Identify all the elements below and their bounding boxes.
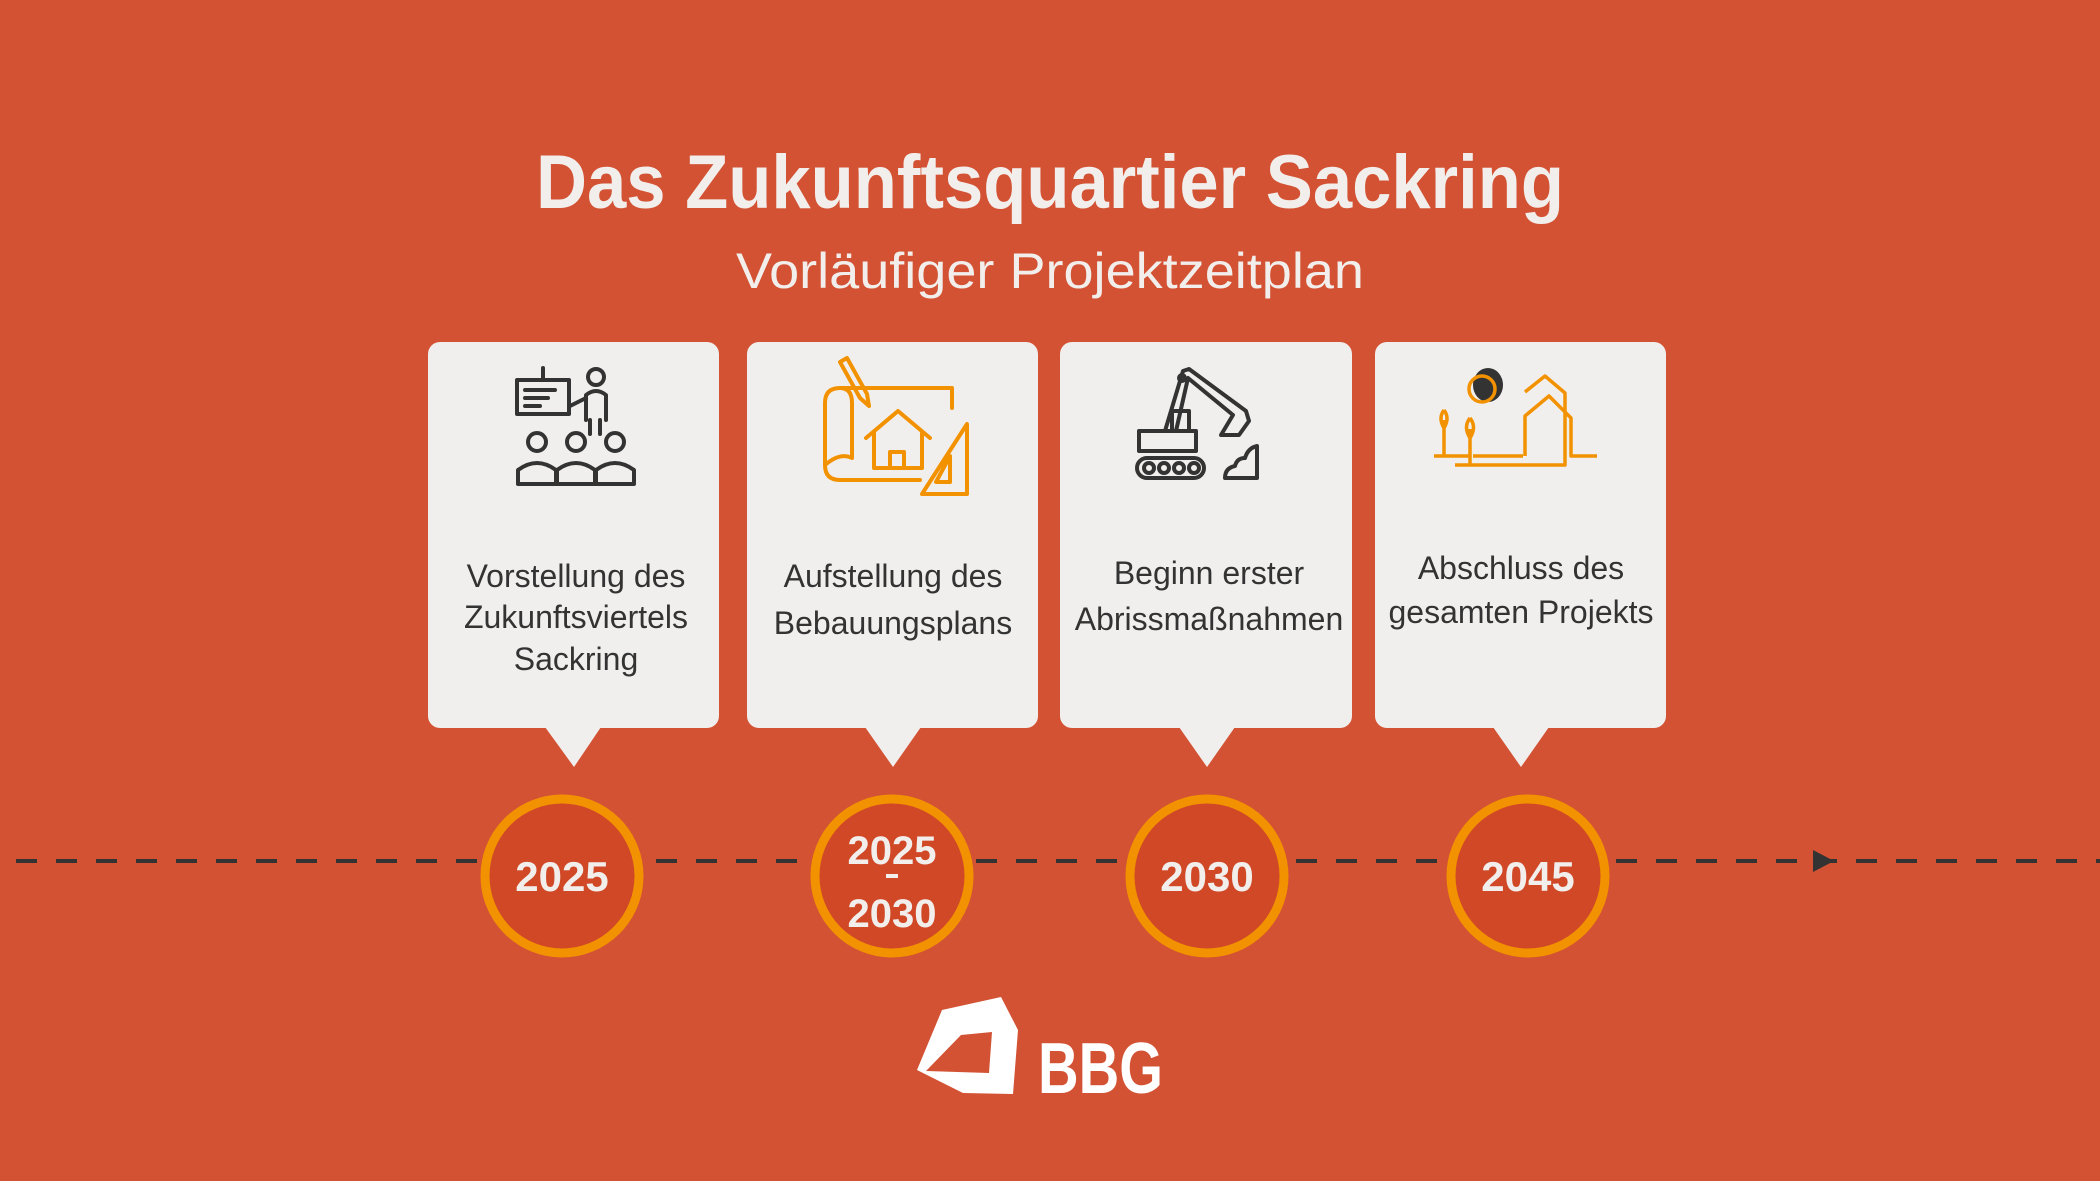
text 3: Beginn erster bbox=[1114, 555, 1305, 591]
timeline dashed line bbox=[16, 859, 2100, 863]
text 1 bbox=[464, 558, 688, 677]
year circle 2030: 2030 bbox=[1160, 853, 1254, 900]
text 4: Abschluss des bbox=[1418, 550, 1624, 586]
year circle 2045: 2045 bbox=[1481, 853, 1575, 900]
year circle 2045 bbox=[1451, 799, 1605, 953]
card 1 bbox=[428, 342, 719, 767]
icon: presentation bbox=[517, 368, 634, 484]
year circle 2030 bbox=[1130, 799, 1284, 953]
icon: excavator bbox=[1137, 369, 1257, 478]
icon: completed neighbourhood bbox=[1434, 368, 1597, 465]
arrow on timeline bbox=[1813, 850, 1834, 872]
icon: blueprint house bbox=[825, 358, 967, 494]
subtitle: Vorläufiger Projektzeitplan bbox=[736, 243, 1364, 299]
title: Das Zukunftsquartier Sackring bbox=[536, 140, 1564, 225]
logo BBG bbox=[917, 997, 1163, 1109]
year circle 2025-2030: 2030 bbox=[848, 892, 936, 936]
text 1: Zukunftsviertels bbox=[464, 599, 688, 635]
logo BBG: BBG bbox=[1038, 1029, 1163, 1109]
year circle 2025-2030: 2025 bbox=[848, 829, 936, 873]
text 2: Aufstellung des bbox=[784, 558, 1002, 594]
text 3 bbox=[1075, 555, 1343, 637]
text 2: Bebauungsplans bbox=[774, 605, 1012, 641]
text 3: Abrissmaßnahmen bbox=[1075, 601, 1343, 637]
year circle 2025: 2025 bbox=[515, 853, 609, 900]
year circle 2025-2030 bbox=[815, 799, 969, 953]
text 1: Vorstellung des bbox=[467, 558, 685, 594]
card 2 bbox=[747, 342, 1038, 767]
text 1: Sackring bbox=[514, 641, 638, 677]
text 4: gesamten Projekts bbox=[1388, 594, 1654, 630]
text 4 bbox=[1388, 550, 1654, 630]
year circle 2025 bbox=[485, 799, 639, 953]
card 4 bbox=[1375, 342, 1666, 767]
card 3 bbox=[1060, 342, 1352, 767]
text 2 bbox=[774, 558, 1012, 641]
